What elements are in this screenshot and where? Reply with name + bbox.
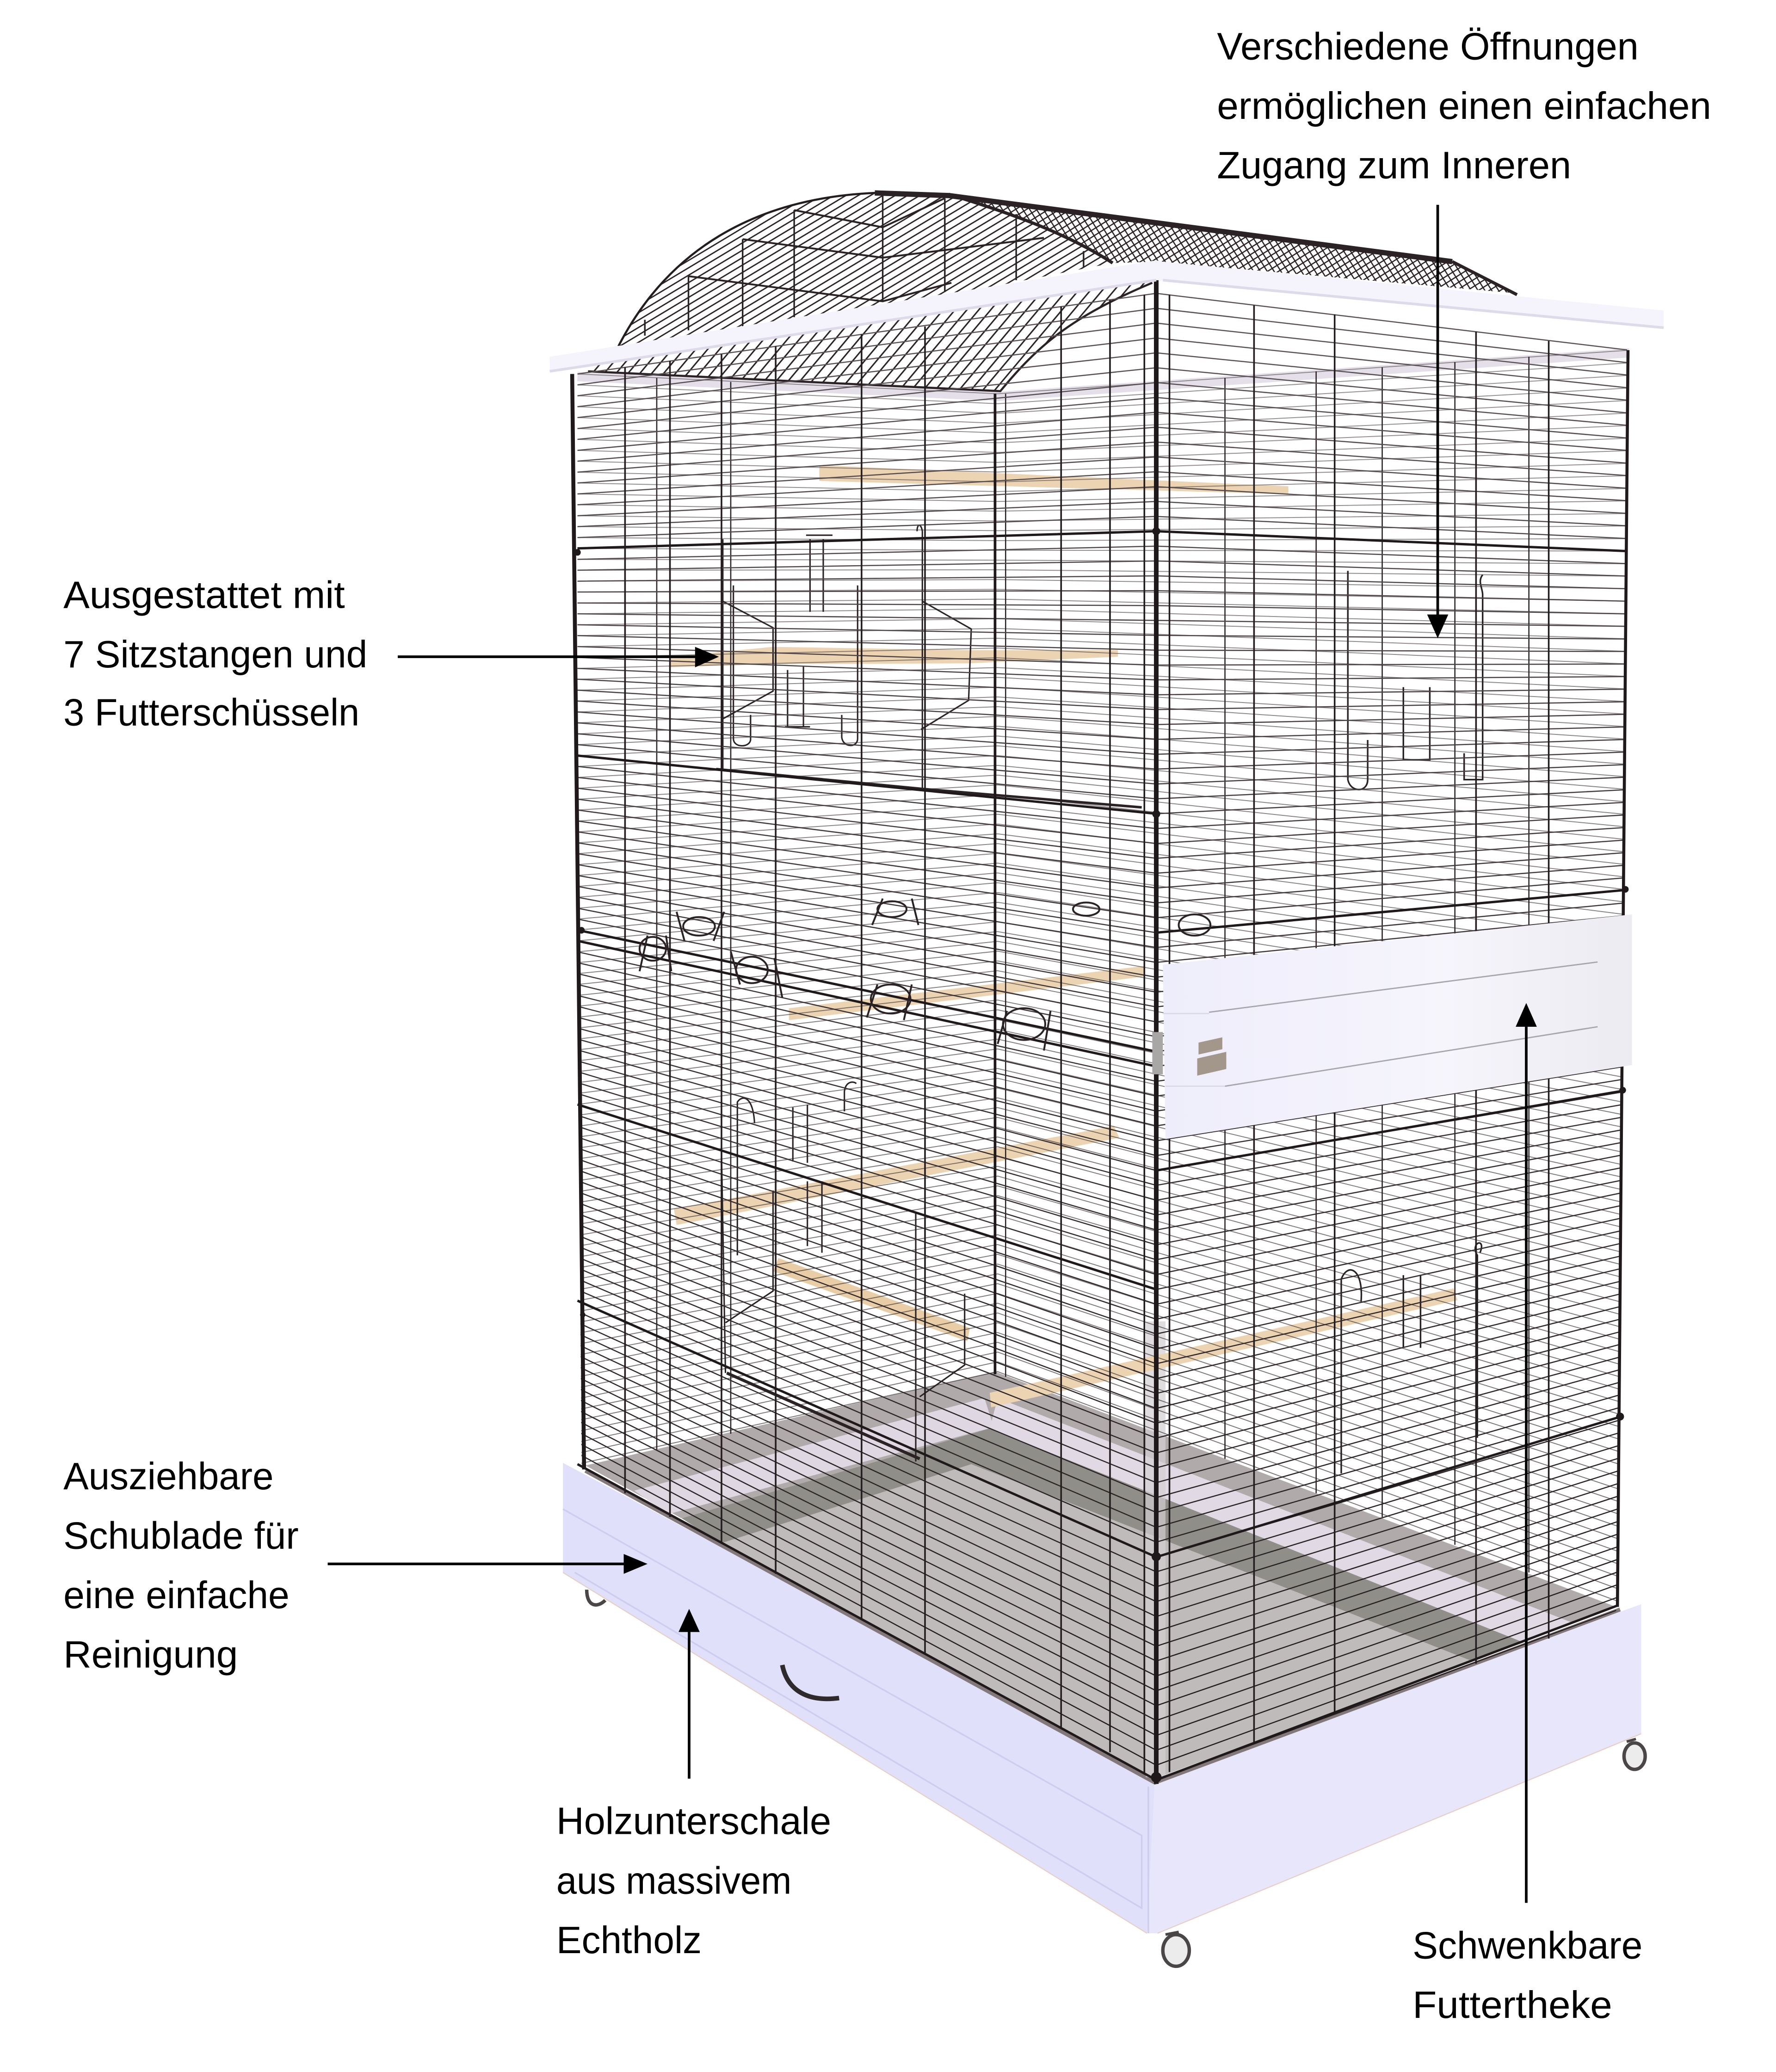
corner posts xyxy=(572,280,1628,1784)
front arch edge xyxy=(588,283,1152,391)
callout: wooden tray xyxy=(556,1609,831,1961)
callout: openings xyxy=(1217,25,1711,638)
rear rim strips xyxy=(578,353,1629,396)
label text: Futtertheke xyxy=(1412,1983,1612,2026)
label text: Holzunterschale xyxy=(556,1800,831,1843)
label text: Zugang zum Inneren xyxy=(1217,144,1571,187)
arrow up to tray xyxy=(678,1609,700,1779)
rear vertical wires xyxy=(657,357,1529,1572)
label text xyxy=(556,1800,831,1961)
label text: Schwenkbare xyxy=(1412,1924,1642,1967)
domed roof mesh xyxy=(618,193,1517,357)
near wire faces xyxy=(578,293,1629,1780)
perch under shelf xyxy=(789,966,1144,1020)
perch right lower xyxy=(990,1289,1457,1407)
perch lower descending xyxy=(773,1258,970,1341)
swivel feeding shelf xyxy=(1152,914,1632,1139)
arrow to drawer xyxy=(328,1554,648,1574)
structural frame wires xyxy=(578,531,1625,1780)
roof slab xyxy=(550,260,1664,371)
label text: Ausgestattet mit xyxy=(63,573,345,616)
clips on middle frame xyxy=(640,899,1210,1050)
near vertical wires xyxy=(625,295,1549,1773)
cage floor tray xyxy=(586,1321,1620,1782)
arrow down xyxy=(1427,205,1448,638)
arrow up to shelf xyxy=(1516,1003,1537,1903)
feeding door wires left lower xyxy=(722,1082,965,1462)
wooden base with drawer xyxy=(563,1463,1641,1933)
front arch mesh below roof xyxy=(588,275,1152,391)
bird cage xyxy=(550,193,1664,1966)
perch left middle xyxy=(670,647,1118,667)
callout: drawer xyxy=(63,1455,648,1676)
label text: eine einfache xyxy=(63,1573,290,1616)
arrow right xyxy=(398,647,719,667)
label text xyxy=(63,1455,299,1676)
callout: perches xyxy=(63,573,719,734)
label text: Reinigung xyxy=(63,1633,238,1676)
label text: 3 Futterschüsseln xyxy=(63,691,359,734)
label text: ermöglichen einen einfachen xyxy=(1217,84,1711,127)
label text: 7 Sitzstangen und xyxy=(63,633,367,676)
perch lower diagonal xyxy=(674,1126,1119,1225)
label text xyxy=(1412,1924,1642,2026)
wheels xyxy=(587,1590,1645,1966)
callout: feeding shelf xyxy=(1412,1003,1642,2026)
label text: Schublade für xyxy=(63,1514,299,1557)
label text: Ausziehbare xyxy=(63,1455,273,1498)
label text: Verschiedene Öffnungen xyxy=(1217,25,1639,68)
drawer handle xyxy=(782,1665,839,1699)
feeding door wires left upper xyxy=(716,525,1142,808)
shelf hinge xyxy=(1152,1032,1163,1074)
label text: aus massivem xyxy=(556,1859,791,1902)
feeding door wires right xyxy=(1341,571,1483,1474)
rear wire faces xyxy=(578,350,1629,1605)
shelf logo xyxy=(1197,1037,1226,1076)
wire joints xyxy=(574,527,1628,1782)
label text xyxy=(1217,25,1711,187)
perch rear top xyxy=(819,465,1289,494)
label text xyxy=(63,573,367,734)
label text: Echtholz xyxy=(556,1918,702,1961)
